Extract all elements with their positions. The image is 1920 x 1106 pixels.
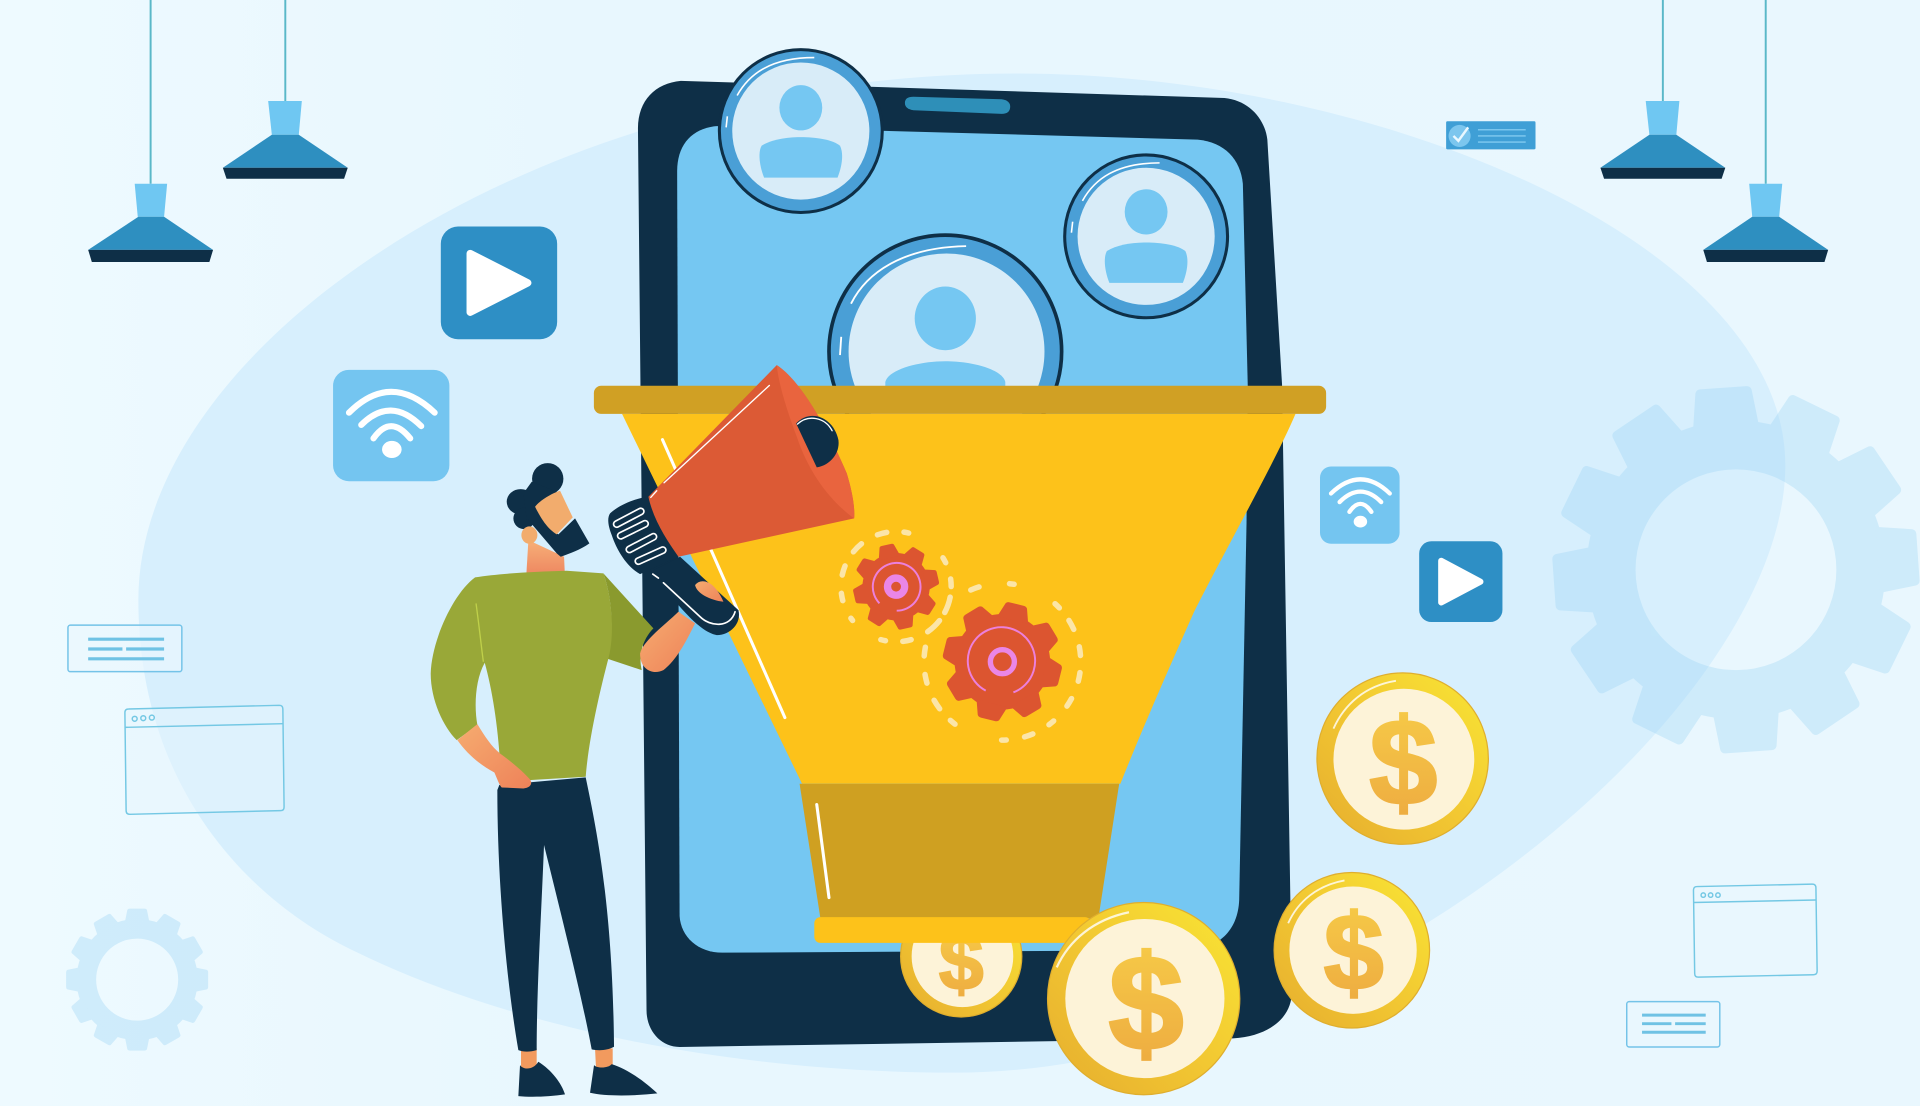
background blob [138,73,1785,1073]
trousers [497,777,614,1052]
user avatar bubble 3 [829,235,1062,468]
play icon large [441,227,557,339]
megaphone grip [608,497,678,574]
funnel neck highlight [817,805,829,898]
gear: small background left [66,909,208,1051]
browser window right [1693,884,1817,977]
neck [526,540,565,582]
ceiling lamp 2 [223,0,348,179]
shirt [431,571,612,782]
text note card right [1627,1002,1720,1047]
phone body [638,81,1292,1047]
megaphone cone [648,365,854,557]
upper body [431,365,854,788]
coin behind funnel [901,896,1022,1017]
text note card left [68,625,182,672]
megaphone button [796,416,839,467]
gear: small red [834,524,958,649]
coin right top: $ [1369,694,1437,831]
checklist card top right [1446,121,1536,149]
coin front large [1048,902,1240,1095]
coin right bottom [1274,872,1430,1028]
face [535,491,573,534]
megaphone highlight [651,385,769,497]
funnel neck [800,784,1119,918]
coin front large: $ [1109,927,1184,1078]
wifi icon large [333,370,449,481]
man with megaphone [431,365,854,1097]
ankles [521,1048,613,1069]
forearm raised [640,612,695,672]
coin right bottom: $ [1324,891,1384,1012]
gear: large red [910,570,1094,754]
wifi icon small [1320,467,1400,544]
funnel highlight [662,440,785,718]
thumb [695,581,723,602]
shoes [518,1062,657,1097]
user avatar bubble 2 [1065,155,1228,318]
coin behind funnel: $ [939,917,984,1007]
lower arm on hip [457,724,531,788]
ceiling lamp 1 [88,0,213,262]
megaphone bell rim [777,365,854,518]
ceiling lamp 3 [1600,0,1725,179]
grip slots [617,511,663,561]
phone screen [677,126,1248,953]
funnel bottom lip [814,917,1091,943]
phone [638,81,1292,1047]
user avatar bubble 1 [719,50,882,212]
megaphone handle [653,557,739,635]
browser window left [125,705,284,814]
funnel [594,386,1326,943]
ear [521,526,537,544]
legs [497,777,657,1097]
funnel rim [594,386,1326,414]
beard [528,506,589,557]
play icon small [1419,541,1502,622]
hair [507,463,563,529]
shirt crease [476,603,483,662]
gear: large background right [1552,385,1920,754]
coin right top [1317,673,1488,844]
phone speaker notch [905,97,1010,114]
sleeve far arm [603,573,653,670]
funnel body [622,414,1296,784]
ceiling lamp 4 [1703,0,1828,262]
